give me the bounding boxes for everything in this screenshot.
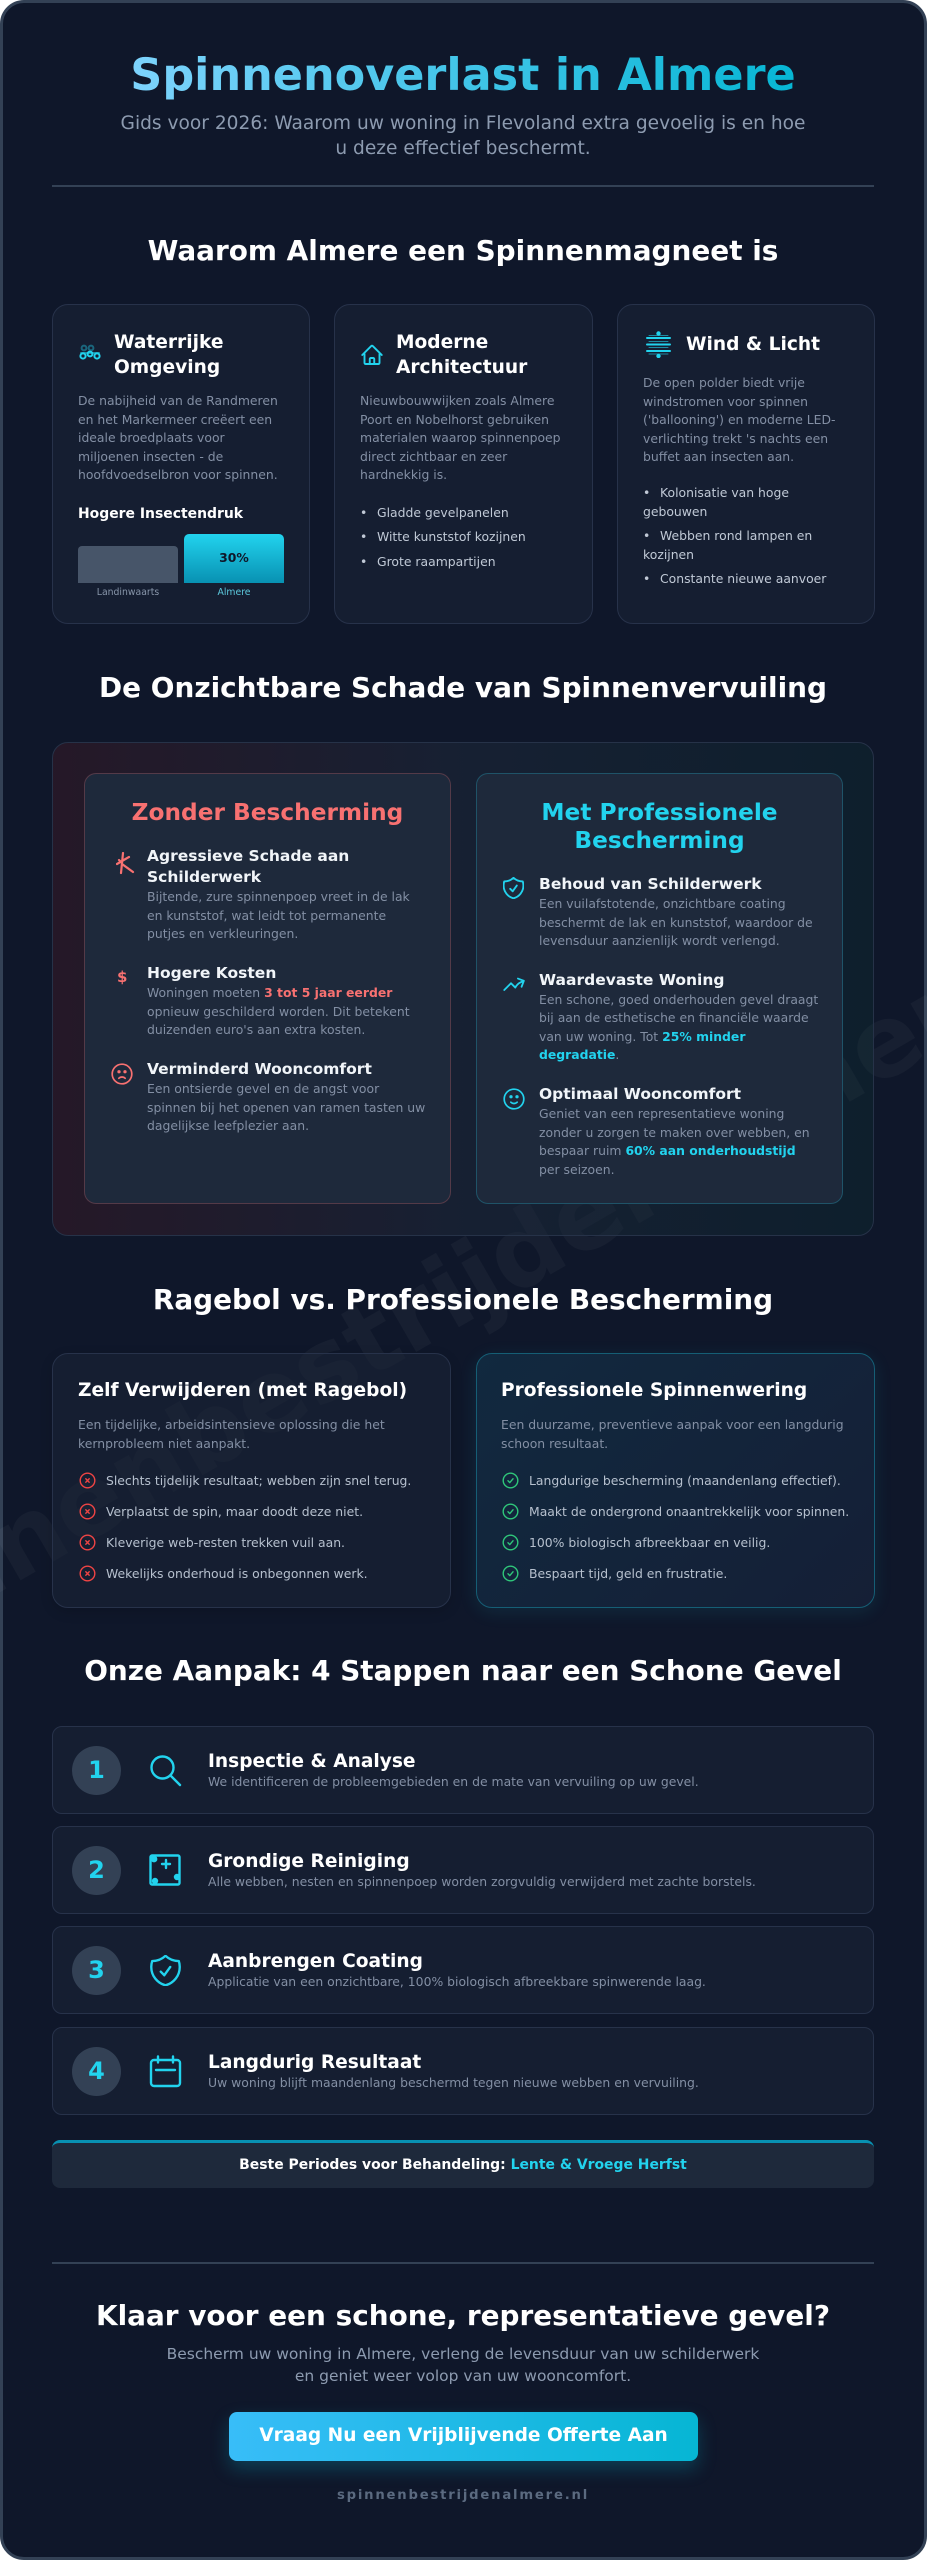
panel: met bescherming (476, 773, 843, 1204)
card text: ideale broedplaats voor (78, 430, 225, 445)
heading: ragebol: Ragebol vs. Professionele Bescherming (153, 1283, 773, 1316)
list: • (360, 504, 367, 520)
card text: De nabijheid van de Randmeren (78, 393, 278, 408)
card title: Professionele Spinnenwering (501, 1380, 807, 1401)
card title: Waterrijke (114, 332, 223, 353)
item text: Geniet van een representatieve woning (539, 1106, 784, 1121)
list: nadelen: Slechts tijdelijk resultaat; webben zijn snel terug. (106, 1473, 411, 1488)
item title: Behoud van Schilderwerk (539, 875, 762, 893)
bar: almere: 30% (219, 550, 249, 565)
card title (114, 332, 223, 378)
card text: materialen waarop spinnenpoep (360, 430, 561, 445)
cta text: en geniet weer volop van uw wooncomfort. (295, 2367, 631, 2385)
card text (360, 393, 561, 482)
card title: Zelf Verwijderen (met Ragebol) (78, 1380, 407, 1401)
step 4: Langdurig Resultaat (208, 2052, 421, 2073)
list: voordelen: Maakt de ondergrond onaantrekkelijk voor spinnen. (529, 1504, 849, 1519)
card text: buffet aan insecten aan. (643, 449, 794, 464)
list: Grote raampartijen (377, 554, 496, 569)
icon: water (79, 344, 101, 360)
step 2: Grondige Reiniging (208, 1851, 410, 1872)
list: • (643, 571, 650, 586)
list (360, 504, 526, 569)
title: Spinnenoverlast in Almere (130, 50, 796, 101)
list: voordelen: 100% biologisch afbreekbaar en veilig. (529, 1535, 770, 1550)
item text: levensduur aanzienlijk wordt verlengd. (539, 933, 780, 948)
step 3: 3 (88, 1956, 105, 1984)
chart heading: Hogere Insectendruk (78, 506, 243, 522)
card title: Wind & Licht (686, 334, 820, 355)
card text: hardnekkig is. (360, 467, 447, 482)
panel: moderne architectuur (334, 304, 593, 624)
card text: verlichting trekt 's nachts een (643, 431, 828, 446)
icon: wind (646, 331, 671, 358)
card text: direct zichtbaar en zeer (360, 449, 507, 464)
item text: dagelijkse leefplezier aan. (147, 1118, 309, 1133)
card text: Poort en Nobelhorst gebruiken (360, 412, 549, 427)
icon: frown (111, 1063, 133, 1085)
heading: cta: Klaar voor een schone, representatieve gevel? (96, 2299, 830, 2332)
icon: damage (116, 852, 134, 874)
icon: smile (503, 1088, 525, 1110)
item text: degradatie. (539, 1047, 619, 1062)
step 4: Uw woning blijft maandenlang beschermd tegen nieuwe webben en vervuiling. (208, 2075, 699, 2090)
list: voordelen: Langdurige bescherming (maandenlang effectief). (529, 1473, 841, 1488)
panel: comparison (52, 742, 874, 1236)
card text: miljoenen insecten - de (78, 449, 223, 464)
list: nadelen: Kleverige web-resten trekken vuil aan. (106, 1535, 345, 1550)
heading: met bescherming: Bescherming (574, 827, 745, 854)
step 2: 2 (88, 1856, 105, 1884)
subtitle: u deze effectief beschermt. (335, 138, 591, 159)
list: nadelen: Verplaatst de spin, maar doodt deze niet. (106, 1504, 363, 1519)
item text: zonder u zorgen te maken over webben, en (539, 1125, 810, 1140)
card text: hoofdvoedselbron voor spinnen. (78, 467, 278, 482)
list: • (643, 485, 650, 500)
step 1: 1 (88, 1756, 105, 1784)
item text (539, 896, 813, 948)
item text (147, 889, 410, 941)
item text: per seizoen. (539, 1162, 615, 1177)
heading: met bescherming: Met Professionele (541, 799, 778, 826)
step 4 (52, 2027, 874, 2115)
card text (501, 1417, 844, 1451)
card text: windstromen voor spinnen (643, 394, 808, 409)
heading: met bescherming (541, 799, 778, 854)
card text: Een duurzame, preventieve aanpak voor een langdurig (501, 1417, 844, 1432)
item text: bespaar ruim 60% aan onderhoudstijd (539, 1143, 796, 1158)
list: Witte kunststof kozijnen (377, 529, 526, 544)
subtitle: Gids voor 2026: Waarom uw woning in Flevoland extra gevoelig is en hoe (121, 113, 805, 134)
item text: duizenden euro's aan extra kosten. (147, 1022, 365, 1037)
cta text: Bescherm uw woning in Almere, verleng de levensduur van uw schilderwerk (167, 2345, 759, 2363)
item title: Optimaal Wooncomfort (539, 1085, 741, 1103)
card title: Moderne (396, 332, 488, 353)
card text (78, 393, 278, 482)
panel: waterrijke omgeving (52, 304, 310, 624)
list: Kolonisatie van hoge (660, 485, 789, 500)
heading: aanpak: Onze Aanpak: 4 Stappen naar een Schone Gevel (84, 1654, 842, 1687)
item text: Een vuilafstotende, onzichtbare coating (539, 896, 786, 911)
step 2 (52, 1826, 874, 1914)
item text (539, 1106, 810, 1177)
card text: schoon resultaat. (501, 1436, 608, 1451)
item title: Verminderd Wooncomfort (147, 1060, 372, 1078)
subtitle (121, 113, 805, 159)
item text (147, 1081, 425, 1133)
footer url: spinnenbestrijdenalmere.nl (337, 2488, 589, 2503)
item text: putjes en verkleuringen. (147, 926, 298, 941)
item title (147, 847, 349, 886)
heading: waarom: Waarom Almere een Spinnenmagneet is (148, 234, 778, 267)
cta text (167, 2345, 760, 2385)
cta button (229, 2412, 698, 2461)
step 4: 4 (88, 2057, 105, 2085)
icon: house (361, 344, 383, 365)
callout: beste periodes (52, 2140, 874, 2188)
card title: Omgeving (114, 357, 220, 378)
item text: Een schone, goed onderhouden gevel draagt (539, 992, 818, 1006)
heading: schade: De Onzichtbare Schade van Spinnenvervuiling (99, 671, 827, 704)
item title: Waardevaste Woning (539, 970, 724, 988)
item text (539, 992, 818, 1062)
item text: opnieuw geschilderd worden. Dit betekent (147, 1004, 410, 1019)
item text: beschermt de lak en kunststof, waardoor de (539, 915, 813, 930)
list: gebouwen Webben rond lampen en (643, 504, 812, 543)
bar: landinwaarts (78, 546, 178, 583)
item text: en kunststof, wat leidt tot permanente (147, 908, 386, 923)
step 1: Inspectie & Analyse (208, 1751, 416, 1772)
step 1: We identificeren de probleemgebieden en de mate van vervuiling op uw gevel. (208, 1774, 699, 1789)
step 3: Applicatie van een onzichtbare, 100% biologisch afbreekbare spinwerende laag. (208, 1974, 706, 1989)
list (643, 485, 826, 586)
step 3 (52, 1926, 874, 2014)
card text (78, 1417, 385, 1451)
label: landinwaarts: Landinwaarts (97, 587, 159, 598)
item text: spinnen bij het openen van ramen tasten uw (147, 1100, 425, 1115)
list: nadelen: Wekelijks onderhoud is onbegonnen werk. (106, 1566, 368, 1581)
item text: bij aan de esthetische en financiële waarde (539, 1010, 809, 1025)
icon: trend (503, 978, 525, 991)
label: almere: Almere (217, 587, 251, 598)
list: • (643, 528, 650, 543)
step 1 (52, 1726, 874, 1814)
list: • (360, 529, 367, 544)
panel: zonder bescherming (84, 773, 451, 1204)
cta button: Vraag Nu een Vrijblijvende Offerte Aan (259, 2425, 668, 2446)
list: nadelen (80, 1472, 411, 1582)
callout: beste periodes: Beste Periodes voor Behandeling: Lente & Vroege Herfst (239, 2157, 687, 2173)
icon: shield (503, 877, 524, 899)
card text: kernprobleem niet aanpakt. (78, 1436, 250, 1451)
card title (396, 332, 528, 378)
heading: zonder: Zonder Bescherming (132, 799, 403, 826)
panel: professionele spinnenwering (476, 1353, 875, 1608)
panel: wind en licht (617, 304, 875, 624)
step 3: Aanbrengen Coating (208, 1951, 423, 1972)
icon: dollar: $ (117, 968, 127, 986)
list: Gladde gevelpanelen (377, 504, 509, 520)
bar chart (78, 534, 284, 598)
card text (643, 375, 836, 464)
item text: Een ontsierde gevel en de angst voor (147, 1081, 379, 1096)
list: kozijnen Constante nieuwe aanvoer (643, 547, 826, 586)
list: voordelen (502, 1472, 849, 1582)
item text (147, 985, 410, 1037)
card text: De open polder biedt vrije (643, 375, 805, 390)
item text: van uw woning. Tot 25% minder (539, 1029, 745, 1044)
panel: zelf verwijderen (52, 1353, 451, 1608)
item text: Bijtende, zure spinnenpoep vreet in de lak (147, 889, 410, 904)
list: voordelen: Bespaart tijd, geld en frustratie. (529, 1566, 727, 1581)
item title: Hogere Kosten (147, 964, 276, 982)
card text: Een tijdelijke, arbeidsintensieve oplossing die het (78, 1417, 385, 1432)
item title: Schilderwerk (147, 868, 261, 886)
item title: Agressieve Schade aan (147, 847, 349, 865)
item text: Woningen moeten 3 tot 5 jaar eerder (147, 985, 392, 1000)
card text: ('ballooning') en moderne LED- (643, 412, 836, 427)
bar: almere (184, 534, 284, 583)
card title: Architectuur (396, 357, 527, 378)
step 2: Alle webben, nesten en spinnenpoep worden zorgvuldig verwijderd met zachte borstels. (208, 1874, 756, 1889)
card text: Nieuwbouwwijken zoals Almere (360, 393, 554, 408)
card text: en het Markermeer creëert een (78, 412, 272, 427)
list: • (360, 554, 367, 569)
